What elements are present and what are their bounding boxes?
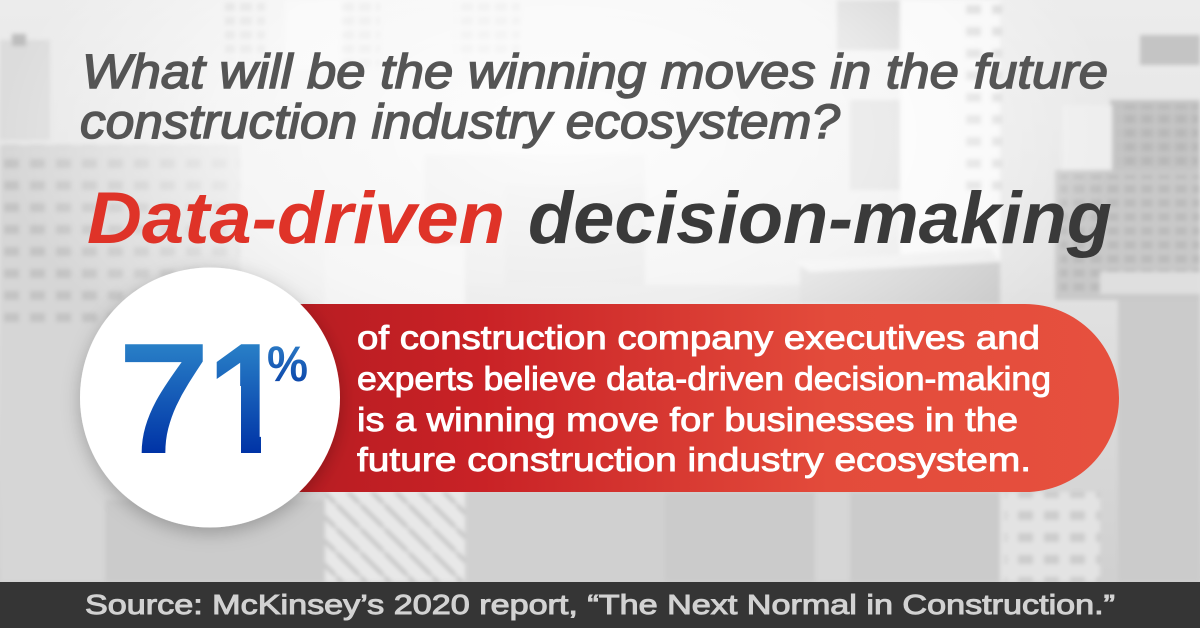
question heading: What will be the winning moves in the future: [82, 46, 1108, 99]
red pill: [210, 304, 1119, 492]
71 percent figure: 7: [118, 311, 210, 487]
question heading: construction industry ecosystem?: [80, 96, 840, 149]
main heading: decision-making: [528, 178, 1112, 259]
71 percent figure: 1: [207, 311, 286, 487]
71 percent figure: %: [267, 336, 308, 392]
description text: future construction industry ecosystem.: [357, 441, 1031, 478]
main heading: [87, 178, 1112, 259]
source bar: Source: McKinsey’s 2020 report, “The Next Normal in Construction.”: [85, 589, 1115, 620]
question heading: [80, 46, 1108, 149]
description text: [357, 319, 1051, 478]
71 percent figure: [125, 344, 307, 453]
source bar: [0, 582, 1200, 628]
white circle: [80, 268, 340, 528]
description text: experts believe data-driven decision-making: [357, 360, 1051, 397]
statistic panel: [80, 268, 1119, 528]
description text: of construction company executives and: [357, 319, 1040, 356]
description text: is a winning move for businesses in the: [357, 401, 1018, 438]
main heading: Data-driven: [87, 178, 505, 259]
